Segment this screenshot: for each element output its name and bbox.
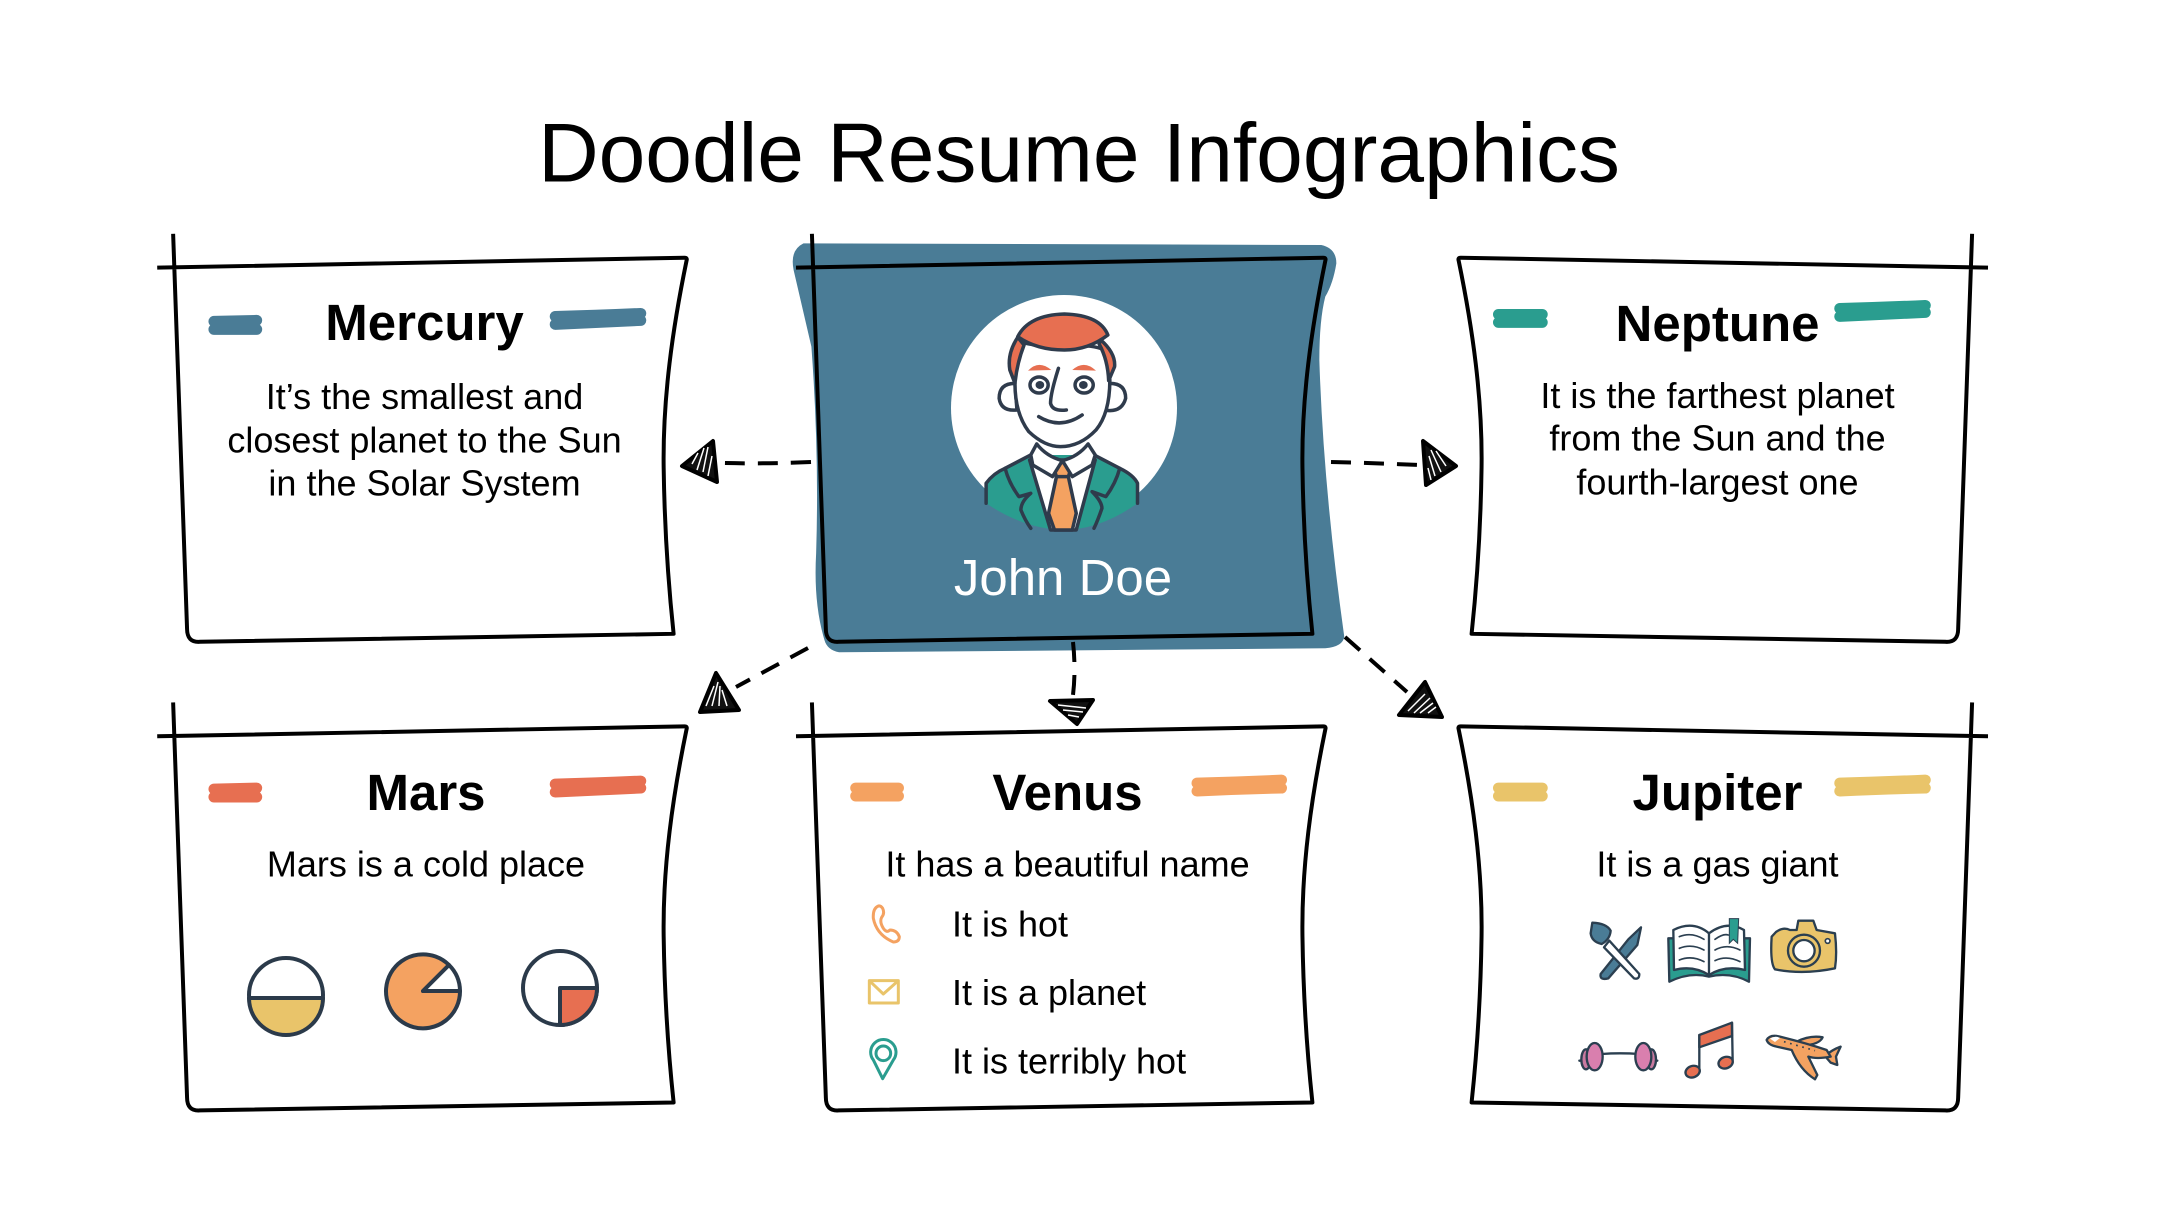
pie chart: quarter (523, 951, 597, 1025)
description: It is the farthest planet (1540, 375, 1895, 416)
avatar portrait (986, 314, 1138, 530)
side hair (1009, 337, 1115, 383)
lapels (1005, 468, 1120, 528)
icon: brush and pencil (1591, 923, 1641, 979)
eyes (1030, 377, 1048, 393)
heading: Neptune (1616, 295, 1820, 352)
brush marks (1498, 780, 1925, 796)
panel: Neptune (1458, 234, 1988, 642)
heading: Mercury (325, 294, 524, 351)
description: Mars is a cold place (267, 844, 585, 884)
arrow: to Neptune (1331, 441, 1456, 485)
name: John Doe (954, 549, 1172, 606)
panel: Venus (796, 702, 1326, 1110)
tie (1049, 462, 1076, 530)
list row: planet: It is a planet (952, 972, 1146, 1013)
frame (1458, 702, 1988, 1110)
icon: envelope (869, 981, 898, 1003)
frame (157, 702, 687, 1110)
heading: Venus (992, 764, 1143, 821)
list row: hot (873, 904, 1068, 944)
brush marks (214, 313, 641, 329)
icon: airplane (1767, 1036, 1841, 1079)
pie chart: seven eighths (386, 954, 460, 1028)
blue background shape (793, 243, 1344, 652)
brush marks (1498, 305, 1925, 322)
frame (796, 702, 1326, 1110)
icon: music note (1684, 1023, 1734, 1079)
nose and mouth (1039, 368, 1082, 423)
heading: Mars (366, 764, 486, 821)
arrow: to Mars (700, 648, 808, 712)
top hair (1018, 314, 1108, 350)
list row: terribly hot: It is terribly hot (952, 1040, 1186, 1082)
description: in the Solar System (268, 462, 581, 504)
brush marks (214, 781, 641, 797)
description: fourth-largest one (1576, 462, 1859, 502)
icon: phone (873, 906, 899, 942)
frame (157, 234, 687, 642)
description: from the Sun and the (1549, 418, 1886, 458)
white avatar circle (951, 295, 1177, 521)
panel: Mercury (157, 234, 687, 642)
description: It is a gas giant (1596, 844, 1839, 884)
pie chart: half (249, 958, 323, 1035)
frame (1458, 234, 1988, 642)
face (1013, 340, 1110, 447)
suit (986, 455, 1138, 530)
arrow: to Jupiter (1345, 637, 1442, 717)
arrow: to Venus (1050, 642, 1093, 724)
heading: Jupiter (1632, 764, 1803, 821)
arrow: to Mercury (682, 441, 811, 482)
sketched frame (796, 234, 1326, 642)
list row: hot: It is hot (952, 904, 1068, 944)
panel: Mars (157, 702, 687, 1110)
shirt (1030, 460, 1095, 530)
icon: camera (1771, 921, 1836, 972)
description: It’s the smallest and (266, 376, 583, 417)
icon: location pin (871, 1040, 896, 1079)
icon set (1579, 919, 1841, 1079)
title: Doodle Resume Infographics (538, 106, 1620, 200)
panel: Jupiter (1458, 702, 1988, 1110)
panel: John Doe profile (793, 234, 1344, 652)
collar (1031, 444, 1095, 477)
description: closest planet to the Sun (227, 420, 622, 460)
brush marks (856, 780, 1282, 796)
brows (1028, 365, 1096, 371)
icon: open book (1668, 919, 1750, 982)
description: It has a beautiful name (885, 844, 1250, 884)
icon: dumbbell (1579, 1043, 1657, 1070)
ears (999, 383, 1126, 411)
